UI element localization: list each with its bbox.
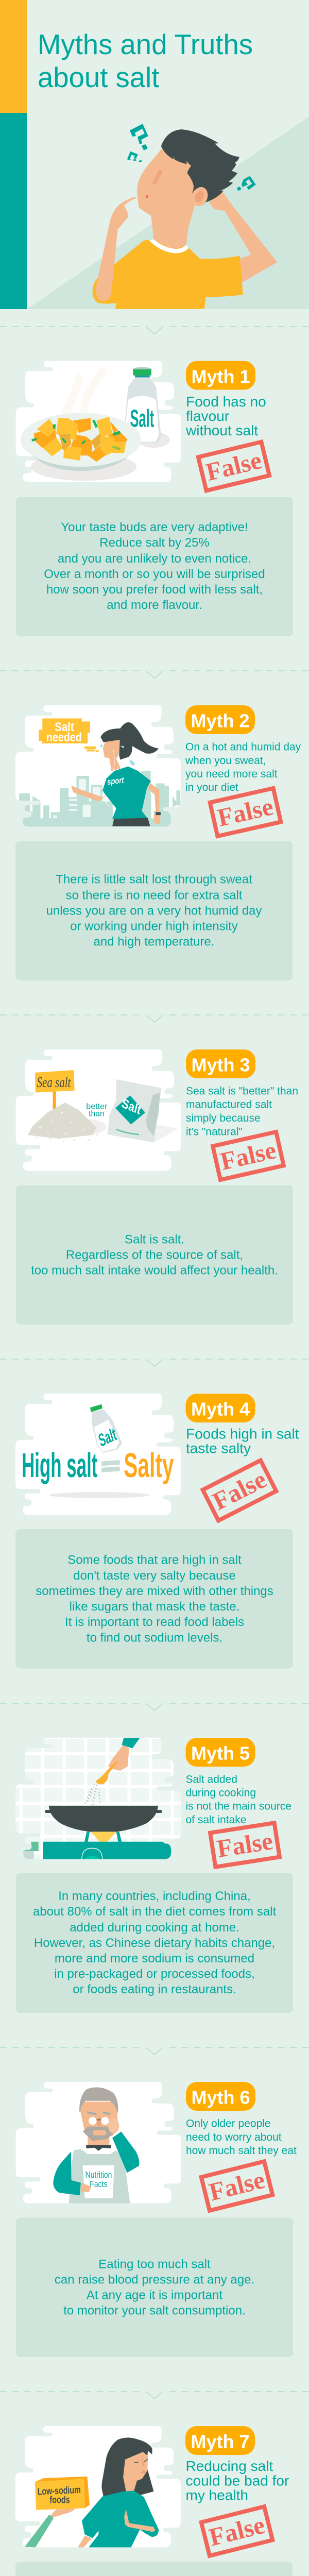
myth 3 truth panel: Salt is salt. — [125, 1232, 184, 1247]
myth 4 truth panel: It is important to read food labels — [65, 1615, 244, 1629]
myth 6 truth panel: to monitor your salt consumption. — [63, 2304, 246, 2317]
myth 4 illustration: high salt equals salty: High salt — [22, 1446, 97, 1484]
myth 1 truth panel: and more flavour. — [107, 598, 202, 612]
myth 3 false stamp: False — [218, 1136, 279, 1176]
myth 5 statement: is not the main source — [185, 1800, 291, 1812]
myth 2 badge — [185, 705, 255, 734]
myth 5 section — [0, 1738, 293, 2013]
myth 6 illustration: older man reading nutrition facts — [16, 2082, 181, 2204]
myth 1 badge — [186, 361, 255, 389]
myth 6 truth panel — [16, 2217, 293, 2357]
myth 6 badge: Myth 6 — [191, 2087, 250, 2108]
myth 3 statement: manufactured salt — [186, 1098, 272, 1111]
myth 3 badge: Myth 3 — [191, 1054, 250, 1076]
myth 2 truth panel: There is little salt lost through sweat — [56, 873, 252, 886]
myth 3 truth panel: too much salt intake would affect your health. — [31, 1263, 278, 1278]
myth 5 truth panel: in pre-packaged or processed foods, — [54, 1967, 255, 1981]
myth 2 section — [12, 705, 301, 980]
myth 5 truth panel: added during cooking at home. — [70, 1921, 239, 1935]
myth 7 illustration: woman refusing low-sodium foods: Low-sodium — [37, 2484, 81, 2497]
myth 6 illustration: older man reading nutrition facts: Nutrition — [85, 2171, 112, 2180]
myth 4 truth panel: like sugars that mask the taste. — [70, 1600, 239, 1614]
myth 3 section — [16, 1049, 298, 1325]
myth 6 section — [16, 2082, 297, 2357]
myth 1 false stamp: False — [203, 446, 264, 486]
myth 1 truth panel: Over a month or so you will be surprised — [44, 567, 265, 581]
myth 1 section — [16, 361, 293, 636]
myth 7 statement: Reducing salt — [185, 2458, 273, 2474]
myth 4 statement: taste salty — [186, 1440, 251, 1456]
myth 1 statement: Food has no — [186, 394, 266, 410]
myth 4 illustration: high salt equals salty: Salty — [124, 1446, 174, 1484]
myth 4 truth panel: sometimes they are mixed with other things — [36, 1584, 273, 1598]
myth 1 truth panel: and you are unlikely to even notice. — [58, 552, 251, 566]
myth 6 truth panel: can raise blood pressure at any age. — [55, 2273, 254, 2286]
myth 2 truth panel — [15, 841, 293, 980]
myth 4 truth panel: to find out sodium levels. — [87, 1631, 222, 1645]
myth 6 truth panel: At any age it is important — [87, 2289, 222, 2302]
myth 2 badge: Myth 2 — [191, 710, 250, 732]
myth 2 truth panel: or working under high intensity — [70, 919, 238, 934]
myth 2 illustration: runner in the city: sport — [107, 776, 125, 787]
myth 5 statement: Salt added — [185, 1773, 237, 1786]
myth 5 truth panel — [16, 1873, 293, 2013]
myth 2 truth panel: and high temperature. — [94, 935, 214, 949]
header illustration: puzzled man — [27, 117, 309, 309]
myth 1 badge: Myth 1 — [191, 366, 250, 387]
myth 6 statement: how much salt they eat — [186, 2145, 297, 2157]
myth 4 truth panel: don't taste very salty because — [73, 1569, 236, 1583]
myth 5 truth panel: or foods eating in restaurants. — [73, 1982, 236, 1996]
myth 5 false stamp: False — [215, 1826, 274, 1863]
myth 1 truth panel: Your taste buds are very adaptive! — [61, 520, 248, 534]
myth 3 truth panel — [16, 1185, 293, 1325]
myth 4 false stamp: False — [208, 1465, 271, 1516]
myth 7 statement: could be bad for — [185, 2473, 289, 2488]
myth 3 truth panel: Regardless of the source of salt, — [66, 1248, 243, 1262]
myth 3 illustration: sea salt versus bagged salt: better — [86, 1102, 108, 1111]
myth 2 truth panel: so there is no need for extra salt — [66, 888, 243, 903]
myth 7 illustration: woman refusing low-sodium foods — [15, 2426, 181, 2548]
myth 7 illustration: woman refusing low-sodium foods: foods — [49, 2494, 70, 2505]
myth 3 statement: simply because — [186, 1112, 261, 1124]
myth 1 truth panel: how soon you prefer food with less salt, — [46, 583, 263, 597]
myth 2 statement: On a hot and humid day — [185, 741, 301, 753]
myth 2 statement: when you sweat, — [185, 755, 266, 767]
myth 2 illustration: runner in the city: needed — [46, 730, 82, 744]
myth 6 false stamp: False — [206, 2165, 267, 2206]
section divider — [0, 327, 309, 334]
myth 3 illustration: sea salt versus bagged salt: Sea salt — [37, 1075, 71, 1091]
myth 5 statement: during cooking — [185, 1787, 256, 1799]
myth 1 truth panel: Reduce salt by 25% — [99, 536, 210, 550]
header colour bar — [0, 0, 27, 309]
myth 4 truth panel — [15, 1529, 293, 1668]
myth 6 badge — [186, 2082, 255, 2111]
myth 5 truth panel: In many countries, including China, — [58, 1889, 251, 1903]
myth 2 statement: you need more salt — [185, 768, 278, 780]
myth 4 illustration: high salt equals salty: Salt — [96, 1424, 118, 1451]
myth 1 illustration: food and salt bottle: Salt — [130, 404, 154, 433]
myth 7 statement: my health — [185, 2487, 248, 2503]
myth 4 truth panel: Some foods that are high in salt — [67, 1553, 242, 1567]
myth 2 false stamp: False — [215, 792, 276, 832]
myth 2 statement: in your diet — [185, 782, 238, 793]
myth 4 statement: Foods high in salt — [186, 1426, 299, 1442]
myth 5 statement: of salt intake — [185, 1814, 246, 1826]
myth 5 truth panel: more and more sodium is consumed — [55, 1952, 254, 1965]
myth 7 false stamp: False — [206, 2511, 267, 2551]
myth 5 badge — [185, 1738, 255, 1767]
myth 5 truth panel: about 80% of salt in the diet comes from salt — [33, 1905, 276, 1919]
myth 4 badge: Myth 4 — [191, 1398, 250, 1420]
myth 3 illustration: sea salt versus bagged salt — [16, 1049, 181, 1171]
myth 4 badge — [185, 1394, 255, 1422]
myth 3 illustration: sea salt versus bagged salt: than — [89, 1109, 105, 1118]
myth 4 section — [15, 1394, 299, 1668]
myth 6 statement: need to worry about — [186, 2131, 282, 2143]
header title: Myths and Truths — [38, 29, 253, 60]
myth 2 illustration: runner in the city: Salt — [55, 720, 74, 734]
myth 3 statement: Sea salt is "better" than — [186, 1085, 298, 1097]
header panel — [0, 0, 309, 309]
myth 3 illustration: sea salt versus bagged salt: Salt — [120, 1095, 143, 1117]
myth 3 badge — [186, 1049, 255, 1078]
myth 6 statement: Only older people — [186, 2117, 271, 2130]
myth 7 badge: Myth 7 — [191, 2431, 250, 2452]
myth 6 truth panel: Eating too much salt — [98, 2258, 211, 2271]
myth 3 statement: it's "natural" — [186, 1126, 243, 1138]
myth 7 section — [15, 2426, 293, 2576]
myth 1 statement: without salt — [185, 422, 258, 438]
myth 4 illustration: high salt equals salty — [15, 1394, 181, 1515]
myth 5 truth panel: However, as Chinese dietary habits change, — [34, 1936, 275, 1950]
myth 1 statement: flavour — [186, 408, 229, 424]
myth 1 truth panel — [16, 497, 293, 636]
myth 7 truth panel — [15, 2562, 293, 2576]
myth 1 illustration: food and salt bottle — [16, 361, 181, 482]
myth 6 illustration: older man reading nutrition facts: Facts — [90, 2180, 108, 2189]
myth 2 truth panel: unless you are on a very hot humid day — [46, 904, 262, 918]
header title: about salt — [38, 62, 159, 93]
myth 5 illustration: salting a wok — [15, 1738, 181, 1859]
myth 5 badge: Myth 5 — [191, 1742, 250, 1764]
myth 7 badge — [185, 2426, 255, 2455]
myth 2 illustration: runner in the city — [12, 705, 181, 828]
